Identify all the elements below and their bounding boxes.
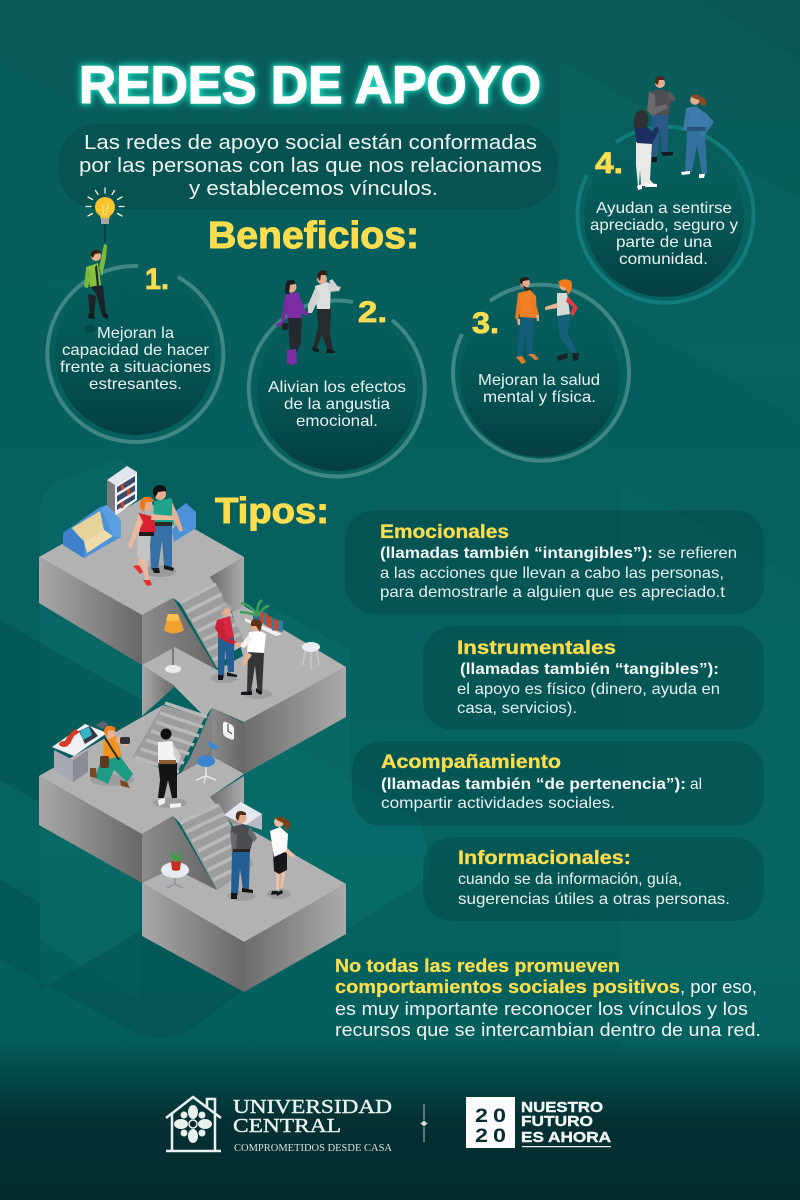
- footer band: [0, 1040, 800, 1200]
- logo: 2020 nuestro futuro es ahora: [466, 1097, 611, 1148]
- furniture: stool: [302, 642, 320, 669]
- logo: 2020 nuestro futuro es ahora: 2: [475, 1126, 488, 1147]
- logo: 2020 nuestro futuro es ahora: 0: [493, 1126, 506, 1147]
- panel: emocionales: para demostrarle a alguien que es apreciado.t: [380, 584, 726, 601]
- benefit 3: 3.: [472, 307, 499, 340]
- panel: instrumentales: (llamadas también “tangibles”):: [460, 661, 719, 678]
- benefit 1: [47, 263, 223, 442]
- logo: 2020 nuestro futuro es ahora: 2: [475, 1106, 488, 1127]
- stairs lower: [180, 805, 253, 890]
- panel: acompañamiento: compartir actividades sociales.: [381, 795, 615, 812]
- icon: house with flower: [166, 1097, 221, 1151]
- panel: emocionales: a las acciones que llevan a cabo las personas,: [380, 565, 724, 582]
- logo: universidad central: UNIVERSIDAD: [233, 1096, 392, 1118]
- panel: instrumentales: el apoyo es físico (dinero, ayuda en: [457, 681, 720, 698]
- intro panel background: [58, 124, 558, 209]
- divider: [421, 1104, 427, 1142]
- intro text: y establecemos vínculos.: [189, 178, 438, 200]
- people: group of three: [634, 76, 714, 190]
- panel: emocionales: (llamadas también “intangibles”):: [380, 545, 653, 562]
- panel: informacionales: [423, 837, 764, 921]
- benefit 3: Mejoran la salud: [478, 372, 600, 389]
- stairs upper: [180, 584, 244, 668]
- man and woman talking: [227, 811, 296, 901]
- panel: acompañamiento: [352, 741, 764, 826]
- furniture: office desk: [52, 721, 109, 782]
- logo: 2020 nuestro futuro es ahora: NUESTRO: [521, 1099, 603, 1116]
- logo: universidad central: COMPROMETIDOS DESDE CASA: [234, 1142, 392, 1154]
- two men shaking hands: [211, 604, 272, 699]
- heading: tipos: Tipos:: [215, 490, 329, 531]
- closing note: [335, 956, 761, 1040]
- furniture: armchair: [172, 503, 196, 542]
- benefit 4: 4.: [595, 147, 623, 180]
- isometric staircase: [39, 499, 346, 992]
- furniture: bookshelf: [107, 466, 137, 516]
- logo: 2020 nuestro futuro es ahora: ES AHORA: [521, 1129, 611, 1146]
- logo: 2020 nuestro futuro es ahora: FUTURO: [521, 1113, 593, 1130]
- panel: emocionales: Emocionales: [380, 522, 509, 543]
- panel: informacionales: Informacionales:: [458, 848, 631, 869]
- photographer kneeling: [90, 726, 134, 788]
- closing note: es muy importante reconocer los vínculos y los: [335, 999, 748, 1019]
- benefit 4: Ayudan a sentirse: [596, 200, 732, 217]
- intro text: Las redes de apoyo social están conformadas: [84, 132, 537, 154]
- icon: light bulb: [86, 188, 124, 242]
- benefit 2: 2.: [358, 296, 387, 329]
- closing note: No todas las redes promueven: [335, 956, 620, 976]
- logo: 2020 nuestro futuro es ahora: 0: [493, 1106, 506, 1127]
- panel: instrumentales: Instrumentales: [457, 638, 616, 659]
- block level 4: [142, 824, 346, 992]
- stairs middle: [133, 703, 207, 773]
- benefit 1: Mejoran la: [97, 325, 174, 342]
- panel: informacionales: sugerencias útiles a otras personas.: [458, 891, 730, 908]
- benefit 4: [578, 127, 754, 303]
- benefit 1: capacidad de hacer: [62, 342, 210, 359]
- woman in white from behind: [153, 728, 187, 808]
- panel: acompañamiento: (llamadas también “de pertenencia”):: [381, 776, 686, 793]
- intro text: por las personas con las que nos relacionamos: [79, 155, 542, 177]
- furniture: blue chair: [196, 741, 218, 783]
- furniture: shelf with plant and books: [240, 600, 283, 636]
- closing note: comportamientos sociales positivos: [335, 977, 680, 997]
- closing note: , por eso,: [680, 977, 757, 997]
- intro text: [79, 132, 542, 200]
- furniture: floor lamp: [164, 614, 184, 673]
- benefit 3: [453, 285, 629, 461]
- furniture: sofa: [63, 505, 121, 558]
- benefit 4: parte de una: [616, 234, 712, 251]
- block level 2: [142, 606, 346, 775]
- benefit 2: [249, 296, 425, 476]
- benefit 4: comunidad.: [619, 251, 708, 268]
- title: REDES DE APOYO: [79, 56, 541, 115]
- furniture: table with plant: [161, 851, 189, 888]
- panel: informacionales: cuando se da información, guía,: [458, 871, 682, 888]
- panel: instrumentales: casa, servicios).: [457, 700, 577, 717]
- panel: acompañamiento: Acompañamiento: [381, 752, 561, 773]
- logo: universidad central: CENTRAL: [233, 1115, 341, 1137]
- closing note: recursos que se intercambian dentro de una red.: [335, 1020, 761, 1040]
- furniture: clock: [223, 721, 234, 741]
- benefit 2: emocional.: [296, 413, 378, 430]
- furniture: side table: [224, 802, 262, 830]
- person: green shirt holding bulb: [84, 244, 108, 333]
- logo: universidad central: [166, 1096, 392, 1154]
- panel: emocionales: se refieren: [658, 545, 737, 562]
- block level 3: [39, 705, 244, 890]
- block level 1: [39, 499, 244, 670]
- panel: instrumentales: [423, 626, 764, 730]
- benefit 1: 1.: [145, 263, 169, 296]
- heading: beneficios: Beneficios:: [208, 215, 419, 257]
- title: REDES DE APOYO: [79, 56, 541, 115]
- benefit 4: apreciado, seguro y: [590, 217, 738, 234]
- benefit 1: estresantes.: [89, 376, 182, 393]
- people: man in orange, woman with red sleeves: [515, 277, 579, 364]
- panel: acompañamiento: al: [690, 776, 702, 793]
- people: couple walking: [275, 270, 341, 365]
- benefit 2: de la angustia: [284, 396, 390, 413]
- couple on top level: [128, 485, 183, 586]
- benefit 1: frente a situaciones: [60, 359, 211, 376]
- benefit 3: mental y física.: [483, 389, 596, 406]
- benefit 2: Alivian los efectos: [268, 379, 406, 396]
- panel: emocionales: [345, 510, 764, 614]
